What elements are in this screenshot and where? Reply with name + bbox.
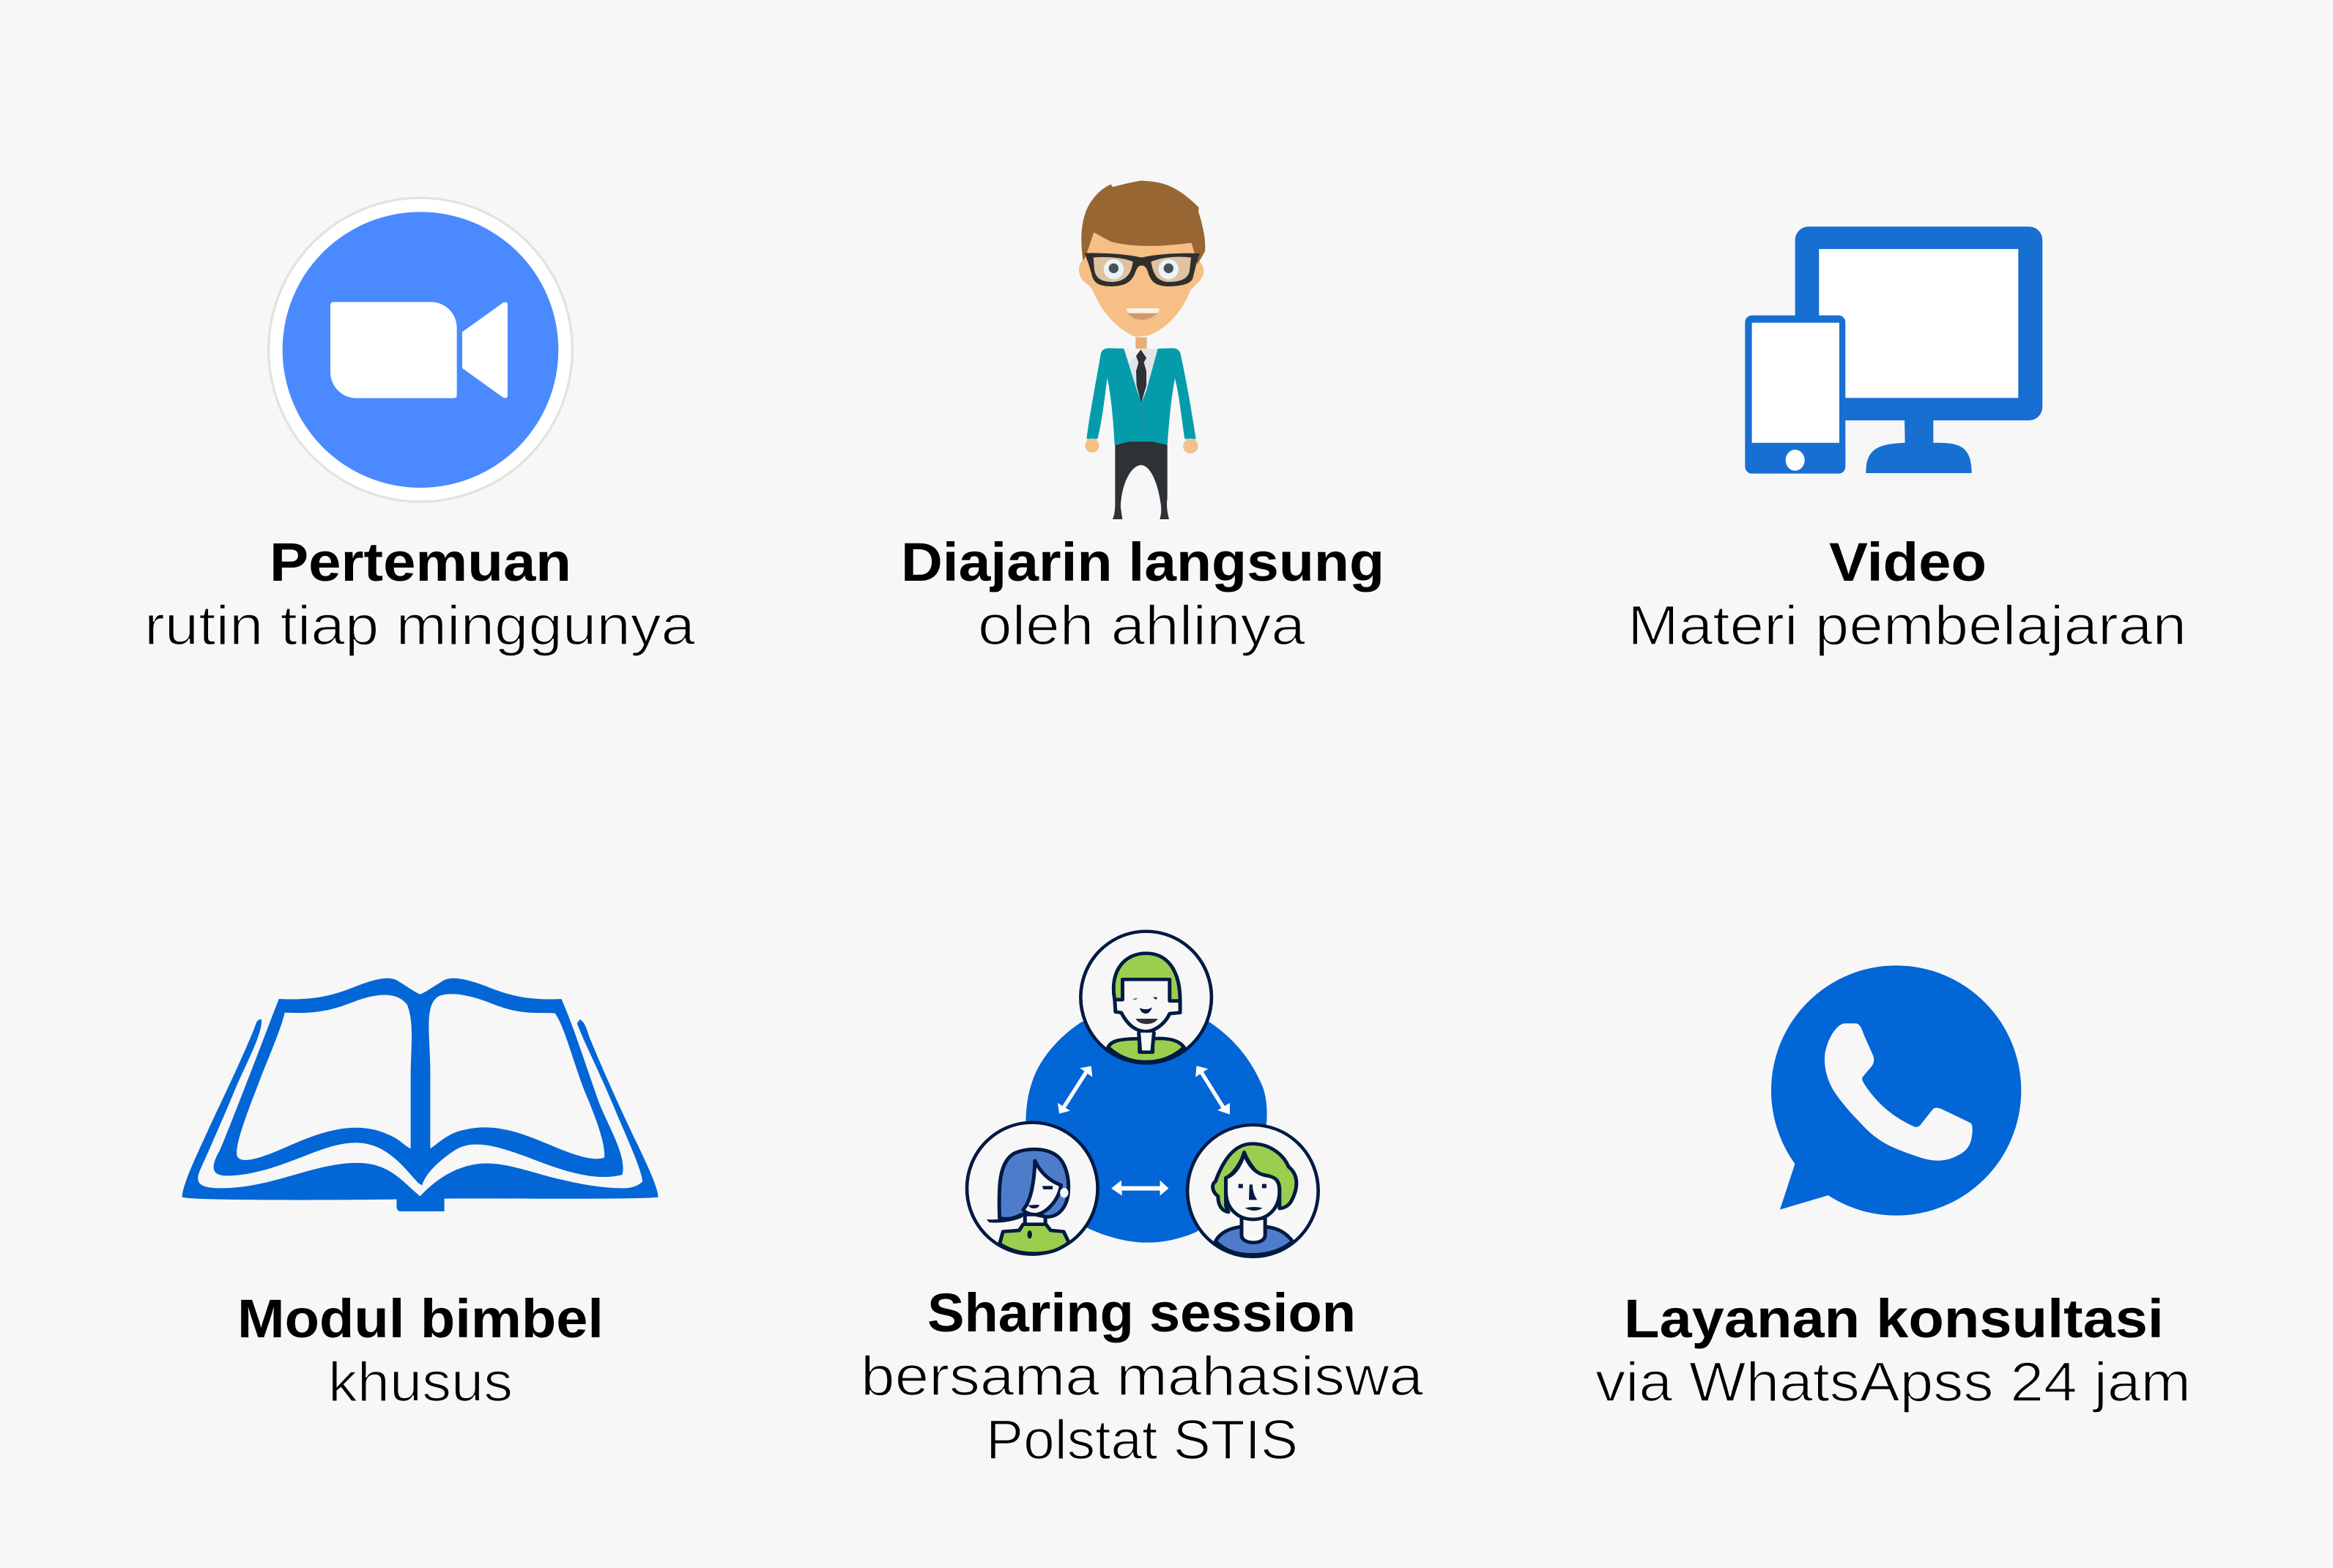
panel: Sharing session [861, 932, 1424, 1471]
heading: Pertemuan: Pertemuan [270, 532, 571, 592]
panel: Pertemuan [144, 198, 696, 657]
text: khusus: khusus [328, 1351, 513, 1413]
arrows between people [1058, 1066, 1230, 1196]
text: Polstat STIS: Polstat STIS [986, 1409, 1298, 1471]
icon: WhatsApp bubble [1771, 965, 2021, 1216]
text: bersama mahasiswa: bersama mahasiswa [861, 1345, 1424, 1408]
person: right man [1187, 1125, 1318, 1257]
icon: teacher with glasses [1079, 181, 1205, 519]
heading: Layanan konsultasi: Layanan konsultasi [1624, 1288, 2164, 1349]
icon: monitor and phone [1745, 226, 2042, 474]
text: Materi pembelajaran: Materi pembelajaran [1628, 595, 2187, 657]
panel: Modul bimbel [182, 978, 659, 1413]
icon: open book [182, 978, 659, 1211]
text: rutin tiap minggunya: rutin tiap minggunya [144, 595, 696, 657]
panel: Layanan konsultasi [1595, 965, 2191, 1413]
text: via WhatsApss 24 jam: via WhatsApss 24 jam [1595, 1351, 2191, 1413]
heading: Modul bimbel: Modul bimbel [237, 1288, 604, 1349]
panel: Diajarin langsung [901, 181, 1384, 657]
heading: Sharing session: Sharing session [927, 1282, 1356, 1343]
icon: video meeting [269, 198, 572, 502]
text: oleh ahlinya: oleh ahlinya [978, 595, 1306, 657]
person: top man [1080, 932, 1212, 1063]
person: left woman [967, 1123, 1098, 1255]
panel: Video [1628, 226, 2187, 657]
icon: three people sharing [967, 932, 1318, 1257]
heading: Video: Video [1829, 532, 1987, 592]
heading: Diajarin langsung: Diajarin langsung [901, 532, 1384, 592]
